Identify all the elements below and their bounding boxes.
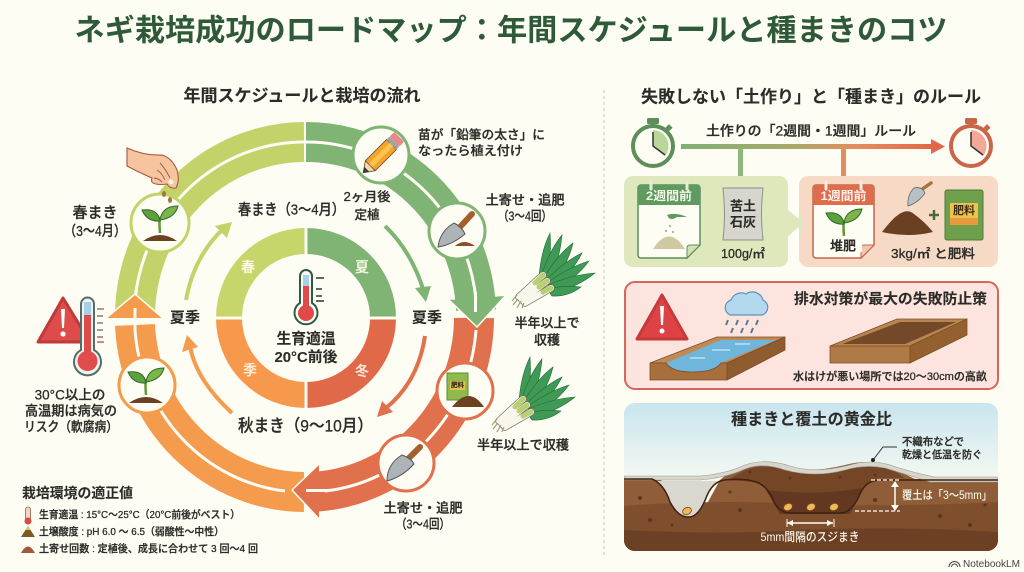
soil cross section	[624, 462, 998, 551]
label: pencil thickness	[418, 127, 545, 158]
stage: compost and fertilizer	[437, 363, 493, 419]
legend heading: 栽培環境の適正値	[22, 485, 133, 501]
season labels	[241, 259, 369, 379]
inner labels: 定植	[354, 207, 380, 222]
label: hilling top	[486, 192, 564, 224]
inner labels: 秋まき（9〜10月）	[238, 416, 373, 436]
arrowhead: green	[447, 292, 507, 327]
label: hilling bottom: （3〜4回）	[396, 516, 450, 532]
label: pencil thickness: なったら植え付け	[418, 143, 523, 158]
timeline arrow	[681, 139, 945, 176]
legend row: temperature	[24, 507, 240, 524]
label: pencil thickness: 苗が「鉛筆の太さ」に	[418, 127, 545, 142]
legend row: soil pH: 土壌酸度 : pH 6.0 〜 6.5（弱酸性〜中性）	[39, 525, 224, 538]
label: hilling bottom: 土寄せ・追肥	[384, 500, 462, 516]
stage: compost and fertilizer: 肥料	[451, 380, 464, 389]
flow arrow: winter	[182, 335, 232, 413]
flow arrow: spring to summer	[186, 222, 232, 300]
icon: red stopwatch	[951, 118, 991, 166]
icon: lime bag: 苦土	[730, 198, 756, 214]
calendar: 1 week: 1週間前	[820, 188, 866, 203]
center label	[274, 330, 338, 366]
panel: two weeks before	[624, 176, 804, 267]
icon: plus	[929, 210, 939, 220]
spacing dimension	[787, 519, 834, 527]
icon: green onion top	[512, 233, 595, 308]
calendar: 1 week	[813, 182, 874, 258]
depth dimension	[855, 480, 900, 511]
icon: fertilizer bag: 肥料	[953, 203, 975, 217]
icon: center thermometer	[294, 270, 324, 324]
icon: raised bed	[830, 319, 967, 363]
label: harvest bottom: 半年以上で収穫	[477, 438, 569, 452]
heading: annual schedule: 年間スケジュールと栽培の流れ	[184, 86, 420, 106]
stage: spring sowing	[131, 194, 189, 252]
center label: 生育適温	[276, 330, 336, 348]
left furrow	[654, 481, 720, 517]
icon: green stopwatch	[633, 118, 673, 166]
inner labels: 夏季	[170, 310, 200, 326]
panel: one week before	[799, 176, 998, 267]
season labels: 春	[241, 259, 255, 275]
furrow line	[624, 479, 998, 517]
stage: autumn seedling	[119, 357, 175, 413]
season labels: 季	[243, 362, 257, 378]
panel: annual schedule	[21, 86, 595, 555]
drainage note: 水はけが悪い場所では20〜30cmの高畝	[793, 369, 987, 383]
cover note: 乾燥と低温を防ぐ	[902, 448, 982, 461]
inner season ring	[214, 226, 398, 410]
heading: rules: 失敗しない「土作り」と「種まき」のルール	[641, 86, 981, 106]
label: harvest top	[514, 316, 580, 348]
spacing label: 5mm間隔のスジまき	[760, 530, 860, 544]
label: harvest top: 収穫	[534, 332, 560, 348]
icon: green onion bottom	[492, 357, 575, 432]
timeline label: 土作りの「2週間・1週間」ルール	[706, 124, 916, 138]
leader line	[871, 447, 897, 462]
season labels: 夏	[355, 259, 369, 275]
icon: small trowel	[908, 183, 931, 206]
label: hilling bottom	[384, 500, 462, 532]
inner labels	[170, 189, 442, 436]
label: hilling top: （3〜4回）	[498, 208, 552, 224]
label: harvest top: 半年以上で	[514, 316, 580, 330]
legend row: temperature: 生育適温 : 15°C〜25°C（20°C前後がベスト）	[39, 508, 240, 521]
icon: lime bag	[723, 188, 763, 240]
icon: heat thermometer	[74, 298, 104, 375]
label: 3kg: 3kg/㎡ と肥料	[891, 246, 976, 261]
label: hilling top: 土寄せ・追肥	[486, 192, 564, 208]
inner labels: 2ヶ月後	[344, 189, 391, 204]
icon: compost pile	[882, 211, 933, 235]
label: 100g: 100g/㎡	[721, 247, 765, 261]
inner labels: 夏季	[412, 310, 442, 326]
seeds	[682, 503, 839, 516]
icon: lime bag: 石灰	[730, 214, 756, 230]
panel: drainage warning	[625, 282, 998, 389]
icon: hand dropping seeds	[127, 148, 178, 203]
icon: flooded bed	[650, 337, 785, 380]
footer logo: NotebookLM	[963, 558, 1020, 570]
panel: seeding and soil cover	[624, 403, 998, 551]
calendar: 2 weeks	[638, 182, 700, 258]
label: heat risk: 高温期は病気の	[25, 402, 117, 418]
stage: hilling trowel	[429, 203, 485, 259]
stage: pencil	[353, 127, 409, 183]
drainage heading: 排水対策が最大の失敗防止策	[794, 290, 988, 308]
soil specks	[638, 470, 986, 527]
flow arrow: autumn	[377, 336, 425, 417]
calendar: 2 weeks: 2週間前	[646, 188, 692, 203]
label: spring sowing: 春まき	[72, 204, 118, 222]
inner labels: 春まき（3〜4月）	[238, 200, 345, 218]
panel: soil and sowing rules	[624, 86, 998, 551]
arrowhead: orange	[105, 294, 164, 330]
label: heat risk	[24, 388, 118, 434]
legend: cultivation environment	[21, 485, 258, 555]
icon: warning	[637, 295, 687, 339]
arrowhead: red	[292, 463, 328, 520]
center label: 20°C前後	[274, 348, 338, 366]
label: spring sowing	[64, 204, 126, 240]
stage: second hilling	[378, 435, 434, 491]
soil heading: 種まきと覆土の黄金比	[731, 410, 892, 428]
icon: rain cloud	[725, 292, 768, 333]
icon: fertilizer bag	[945, 190, 983, 240]
icon: warning triangle	[38, 298, 90, 342]
calendar: 1 week: 堆肥	[830, 238, 856, 254]
legend row: hilling count: 土寄せ回数 : 定植後、成長に合わせて 3 回〜4 回	[39, 542, 258, 555]
season labels: 冬	[355, 363, 369, 379]
label: spring sowing: （3〜4月）	[64, 223, 126, 240]
label: heat risk: 30°C以上の	[35, 388, 105, 402]
cover note	[902, 435, 982, 461]
flow arrow: summer	[385, 226, 431, 302]
depth label: 覆土は「3〜5mm」	[902, 488, 992, 502]
label: heat risk: リスク（軟腐病）	[24, 420, 118, 434]
nonwoven cover	[624, 462, 998, 482]
title: ネギ栽培成功のロードマップ：年間スケジュールと種まきのコツ	[74, 14, 948, 48]
cover note: 不織布などで	[902, 435, 964, 448]
outer cycle ring	[135, 142, 476, 492]
divider	[603, 90, 605, 556]
